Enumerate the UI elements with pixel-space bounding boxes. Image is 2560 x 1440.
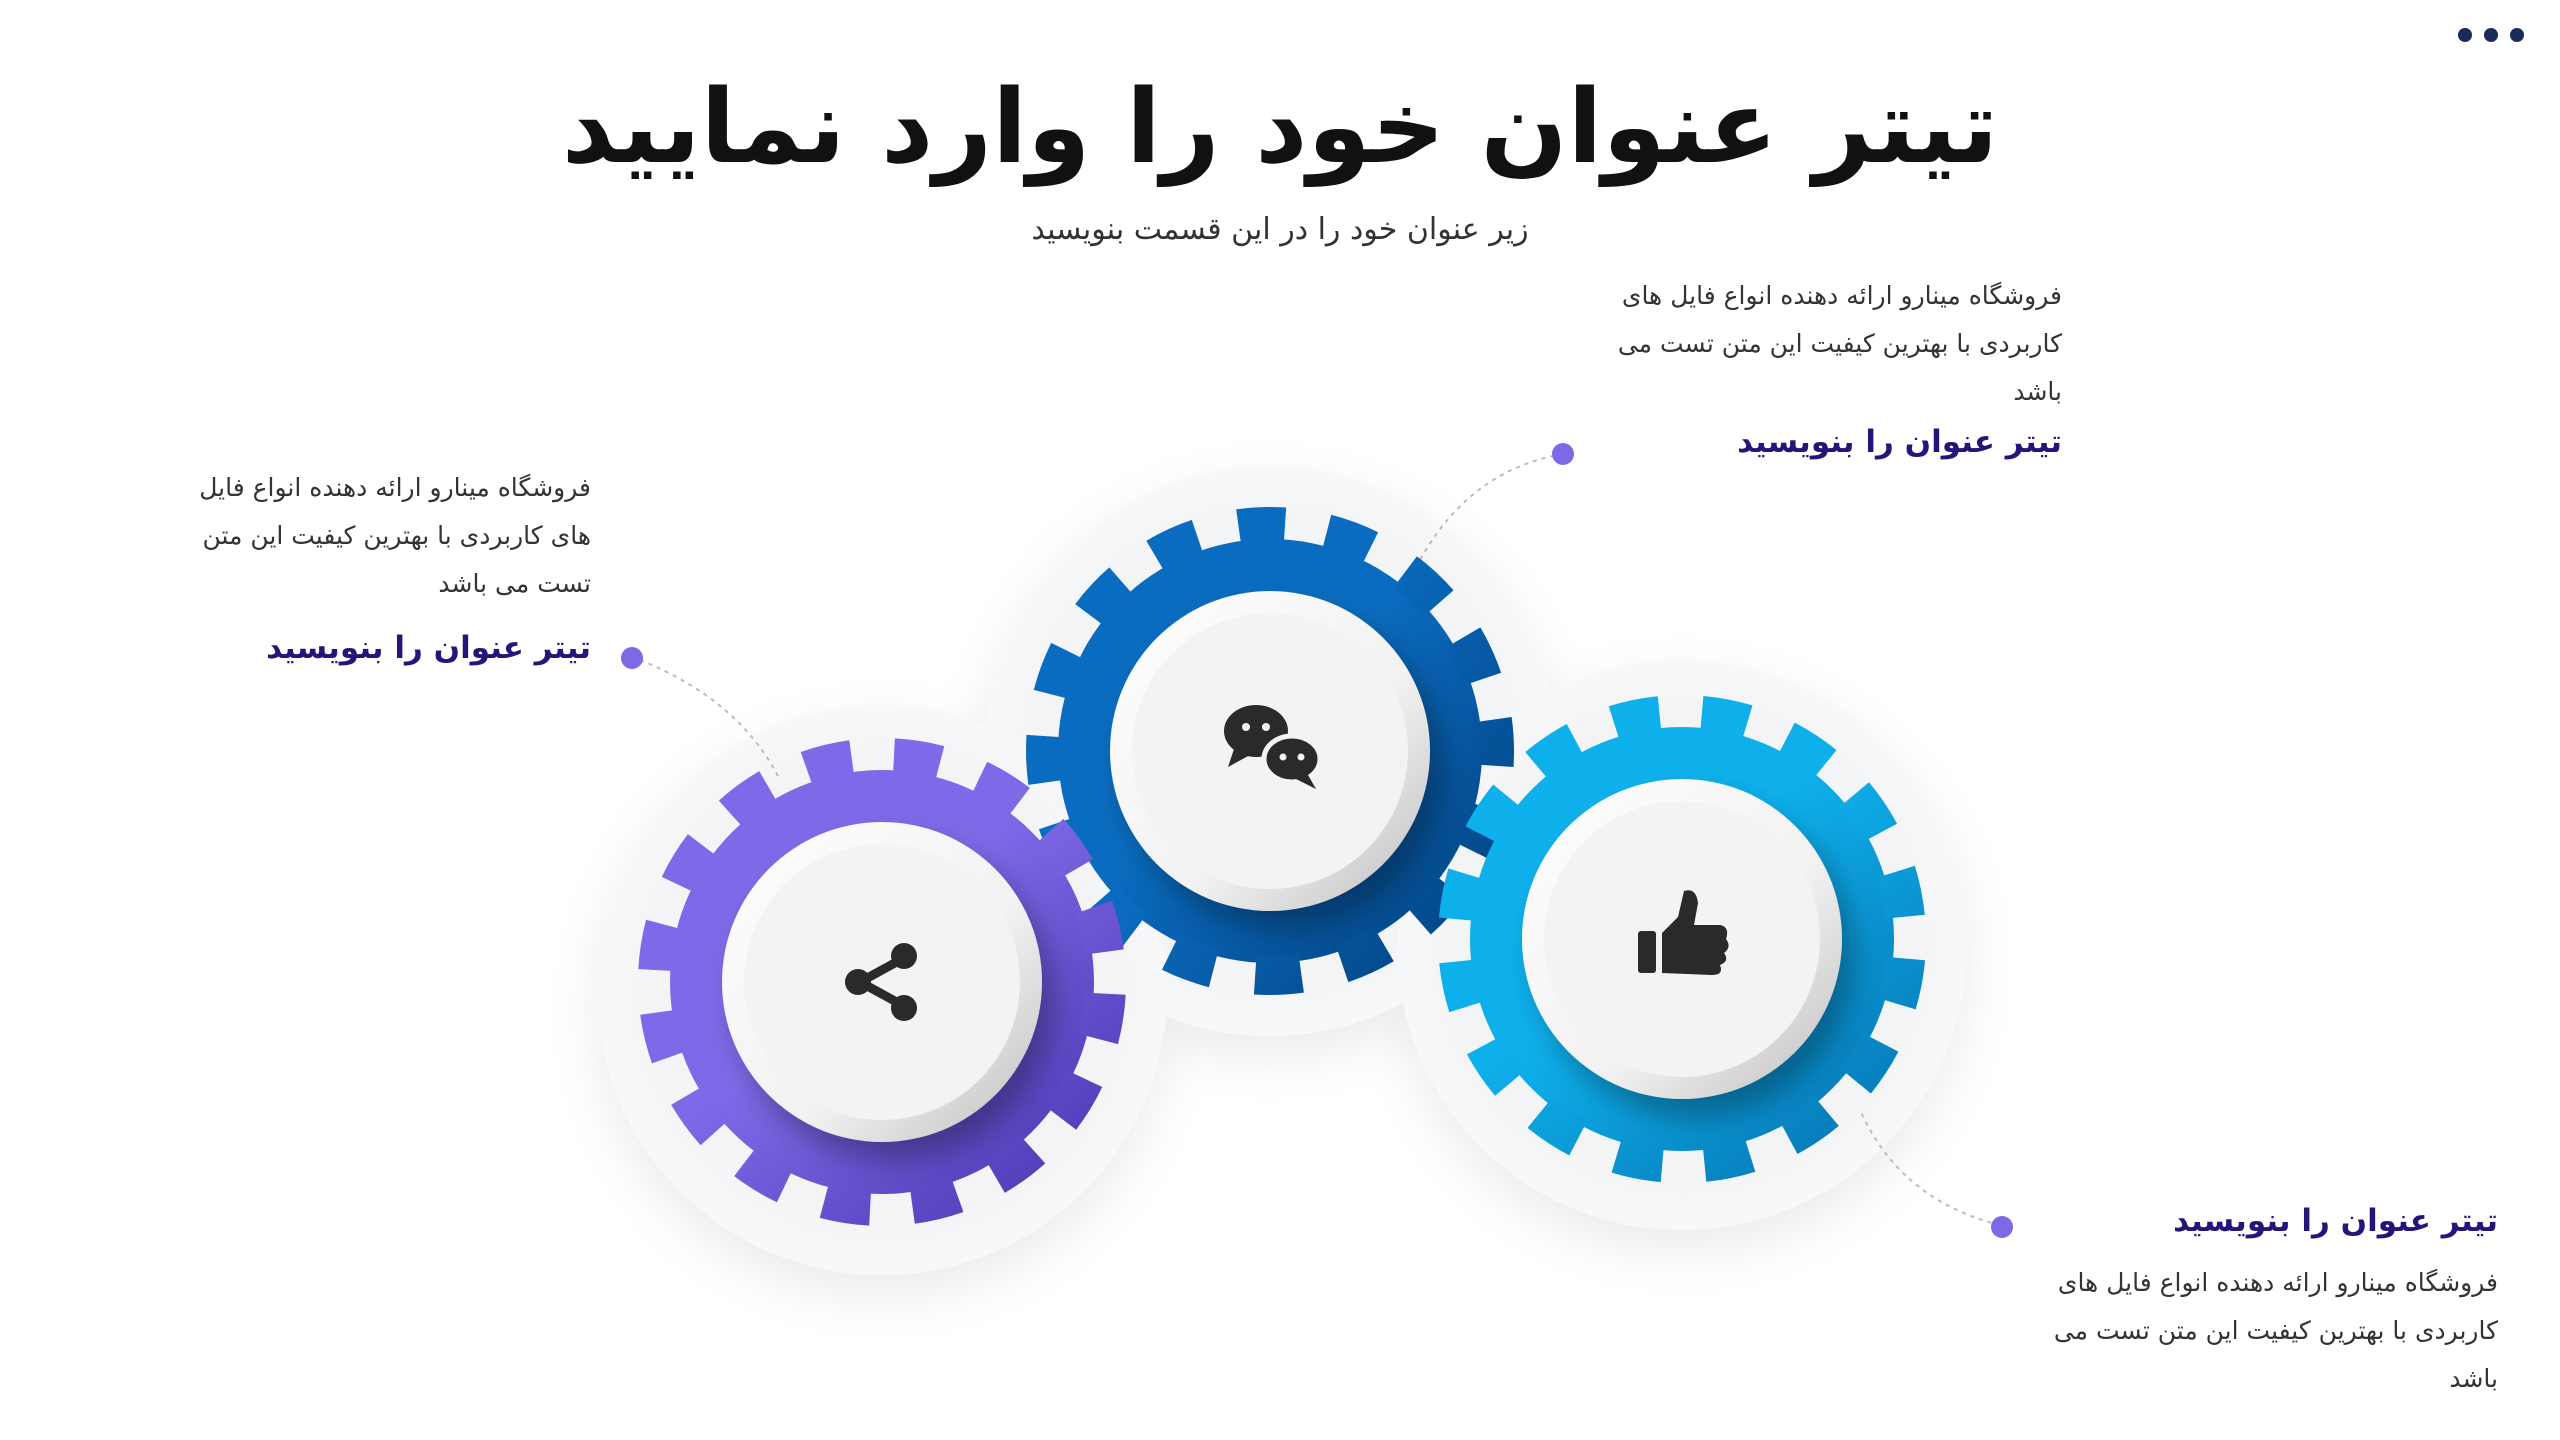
text block: bottom right: فروشگاه مینارو ارائه دهنده انواع فایل های کاربردی با بهترین کیفیت این متن تست می باشد bbox=[2054, 1268, 2498, 1393]
connector lines bbox=[640, 454, 2000, 1225]
gear: blue (chat) bbox=[1017, 498, 1523, 1004]
dots bbox=[621, 443, 2013, 1238]
title: تیتر عنوان خود را وارد نمایید bbox=[562, 68, 1998, 187]
subtitle: زیر عنوان خود را در این قسمت بنویسید bbox=[1031, 212, 1529, 247]
text block: top right: تیتر عنوان را بنویسید bbox=[1737, 424, 2062, 460]
icon: thumbs up bbox=[1638, 890, 1729, 975]
background circles bbox=[597, 466, 1967, 1275]
icon: chat bbox=[1224, 705, 1320, 789]
icon: share bbox=[845, 943, 917, 1021]
text block: bottom right: تیتر عنوان را بنویسید bbox=[2173, 1203, 2498, 1239]
text block: left: تیتر عنوان را بنویسید bbox=[266, 630, 591, 666]
text block: bottom right bbox=[2054, 1203, 2498, 1393]
text block: left: فروشگاه مینارو ارائه دهنده انواع فایل های کاربردی با بهترین کیفیت این متن تست می باشد bbox=[199, 473, 591, 598]
text block: left bbox=[199, 473, 591, 666]
gear: cyan (like) bbox=[1439, 696, 1925, 1182]
text block: top right: فروشگاه مینارو ارائه دهنده انواع فایل های کاربردی با بهترین کیفیت این متن تست می باشد bbox=[1618, 281, 2062, 406]
gear: purple (share) bbox=[647, 747, 1117, 1217]
text block: top right bbox=[1618, 281, 2062, 460]
menu dots bbox=[2458, 28, 2524, 42]
